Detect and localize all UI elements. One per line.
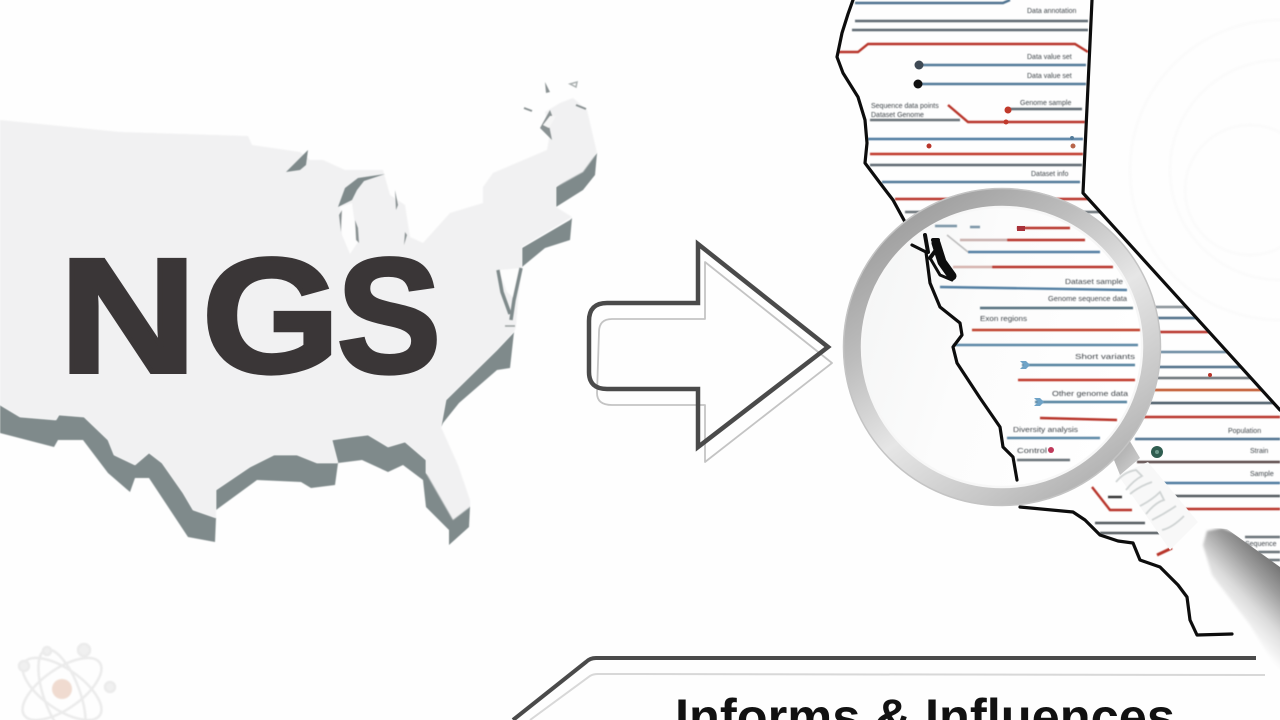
magnified coastline with bay [912, 235, 1017, 480]
magnified labels: Exon regions [980, 316, 1028, 323]
faint background arcs [1130, 20, 1280, 320]
track labels [871, 8, 1277, 548]
California genome map [837, 0, 1280, 635]
banner echo outline [530, 674, 1265, 720]
banner main outline [513, 658, 1256, 720]
banner: Informs & Influences [513, 658, 1265, 720]
atom nucleus [52, 679, 72, 699]
track labels: Strain [1250, 448, 1268, 455]
track labels: Data value set [1027, 73, 1072, 80]
great lakes and northern details [286, 82, 586, 326]
track labels: Dataset Genome [871, 112, 924, 119]
atom orbits [13, 644, 111, 720]
arrow pointing to magnified California [589, 244, 832, 462]
track labels: Data annotation [1027, 8, 1077, 15]
state outline [837, 0, 1280, 635]
arrow main outline [589, 244, 828, 447]
map land [0, 98, 597, 520]
US map with NGS label [0, 82, 597, 545]
atom electrons [19, 644, 115, 692]
track labels: Data value set [1027, 54, 1072, 61]
lens rim [852, 198, 1152, 496]
magnified labels: Diversity analysis [1013, 427, 1079, 434]
handle spring [1116, 462, 1198, 550]
track labels: Sequence [1245, 541, 1277, 548]
track labels: Population [1228, 428, 1261, 435]
NGS letters [59, 224, 441, 407]
magnified labels: Genome sequence data [1048, 296, 1127, 303]
track markers [914, 60, 1212, 458]
track labels: Genome sample [1020, 100, 1071, 107]
map extrusion shadow [0, 153, 597, 545]
handle grip [1202, 528, 1280, 661]
magnifying glass [844, 188, 1280, 720]
icon: faded atom watermark [13, 644, 115, 720]
magnified labels [980, 279, 1136, 455]
magnified markers [1017, 226, 1054, 453]
arrow echo outline [597, 262, 832, 462]
magnified labels: Dataset sample [1065, 279, 1123, 286]
magnified labels: Short variants [1075, 354, 1136, 361]
track labels: Sequence data points [871, 103, 939, 110]
letter N: N [59, 224, 197, 407]
track labels: Dataset info [1031, 171, 1068, 178]
magnified labels: Control [1017, 448, 1048, 455]
letter S: S [337, 224, 441, 407]
magnified tracks [935, 226, 1140, 460]
letter G: G [202, 224, 340, 407]
magnified labels: Other genome data [1052, 391, 1128, 398]
track labels: Sample [1250, 471, 1274, 478]
sequence tracks [838, 0, 1280, 560]
lens collar [1110, 438, 1140, 475]
